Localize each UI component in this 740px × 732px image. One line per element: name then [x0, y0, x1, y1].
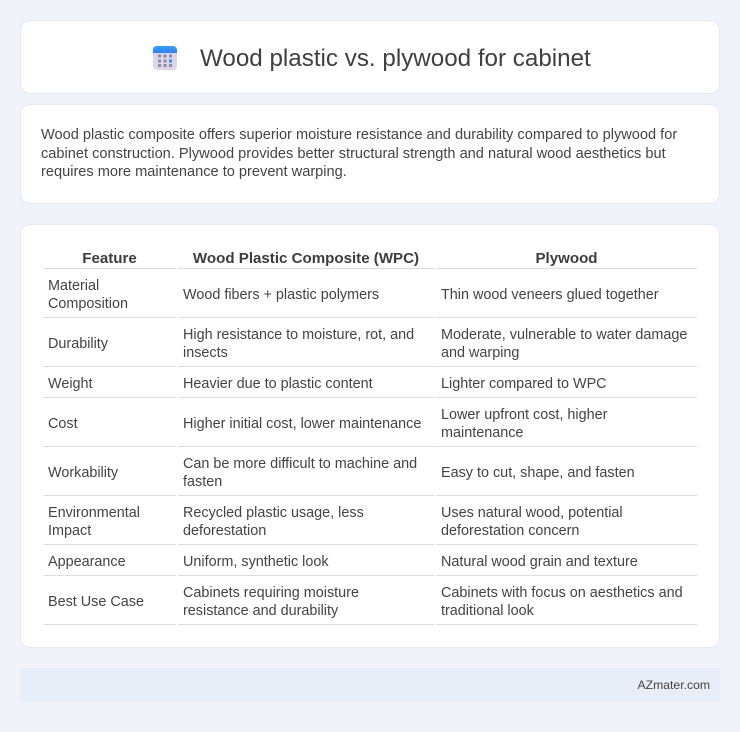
- row: material composition: Composition: [48, 296, 128, 312]
- plywood cost: maintenance: [441, 425, 523, 441]
- plywood durability: Moderate, vulnerable to water damage: [441, 327, 687, 343]
- row: environmental impact: [48, 505, 140, 539]
- plywood durability: [441, 327, 687, 361]
- plywood best use: [441, 585, 683, 619]
- summary text: requires more maintenance to prevent warping.: [41, 164, 347, 180]
- footer: [20, 668, 720, 702]
- title: Wood plastic vs. plywood for cabinet: [200, 45, 591, 72]
- row: workability: Workability: [48, 465, 118, 481]
- plywood weight: Lighter compared to WPC: [441, 376, 607, 392]
- summary card: [20, 104, 720, 204]
- WPC best use: [183, 585, 359, 619]
- row: cost: Cost: [48, 416, 78, 432]
- WPC workability: [183, 456, 417, 490]
- plywood cost: Lower upfront cost, higher: [441, 407, 607, 423]
- row: best use case: Best Use Case: [48, 594, 144, 610]
- header: feature: Feature: [82, 250, 137, 267]
- plywood material: Thin wood veneers glued together: [441, 287, 659, 303]
- WPC durability: High resistance to moisture, rot, and: [183, 327, 414, 343]
- summary text: cabinet construction. Plywood provides better structural strength and natural wood aesthetics but: [41, 146, 666, 162]
- row: appearance: Appearance: [48, 554, 126, 570]
- WPC best use: resistance and durability: [183, 603, 338, 619]
- WPC durability: insects: [183, 345, 228, 361]
- row: weight: Weight: [48, 376, 93, 392]
- WPC environmental: Recycled plastic usage, less: [183, 505, 364, 521]
- WPC appearance: Uniform, synthetic look: [183, 554, 329, 570]
- plywood workability: Easy to cut, shape, and fasten: [441, 465, 635, 481]
- title card: [20, 20, 720, 94]
- summary text: [41, 127, 677, 180]
- WPC durability: [183, 327, 414, 361]
- plywood durability: and warping: [441, 345, 519, 361]
- WPC best use: Cabinets requiring moisture: [183, 585, 359, 601]
- header: plywood: Plywood: [535, 250, 598, 267]
- WPC weight: Heavier due to plastic content: [183, 376, 373, 392]
- table card: [20, 224, 720, 648]
- row: material composition: [48, 278, 128, 312]
- row: environmental impact: Impact: [48, 523, 91, 539]
- plywood environmental: Uses natural wood, potential: [441, 505, 623, 521]
- header: WPC: Wood Plastic Composite (WPC): [193, 250, 419, 267]
- WPC cost: Higher initial cost, lower maintenance: [183, 416, 421, 432]
- icon: calendar: [153, 46, 177, 70]
- footer brand: AZmater.com: [638, 678, 710, 692]
- row: environmental impact: Environmental: [48, 505, 140, 521]
- WPC workability: fasten: [183, 474, 222, 490]
- WPC workability: Can be more difficult to machine and: [183, 456, 417, 472]
- plywood best use: traditional look: [441, 603, 534, 619]
- summary text: Wood plastic composite offers superior moisture resistance and durability compared to plywood for: [41, 127, 677, 143]
- WPC environmental: deforestation: [183, 523, 266, 539]
- row: durability: Durability: [48, 336, 108, 352]
- plywood appearance: Natural wood grain and texture: [441, 554, 638, 570]
- WPC material: Wood fibers + plastic polymers: [183, 287, 379, 303]
- row: material composition: Material: [48, 278, 99, 294]
- plywood environmental: deforestation concern: [441, 523, 579, 539]
- plywood environmental: [441, 505, 623, 539]
- plywood cost: [441, 407, 608, 441]
- plywood best use: Cabinets with focus on aesthetics and: [441, 585, 683, 601]
- WPC environmental: [183, 505, 364, 539]
